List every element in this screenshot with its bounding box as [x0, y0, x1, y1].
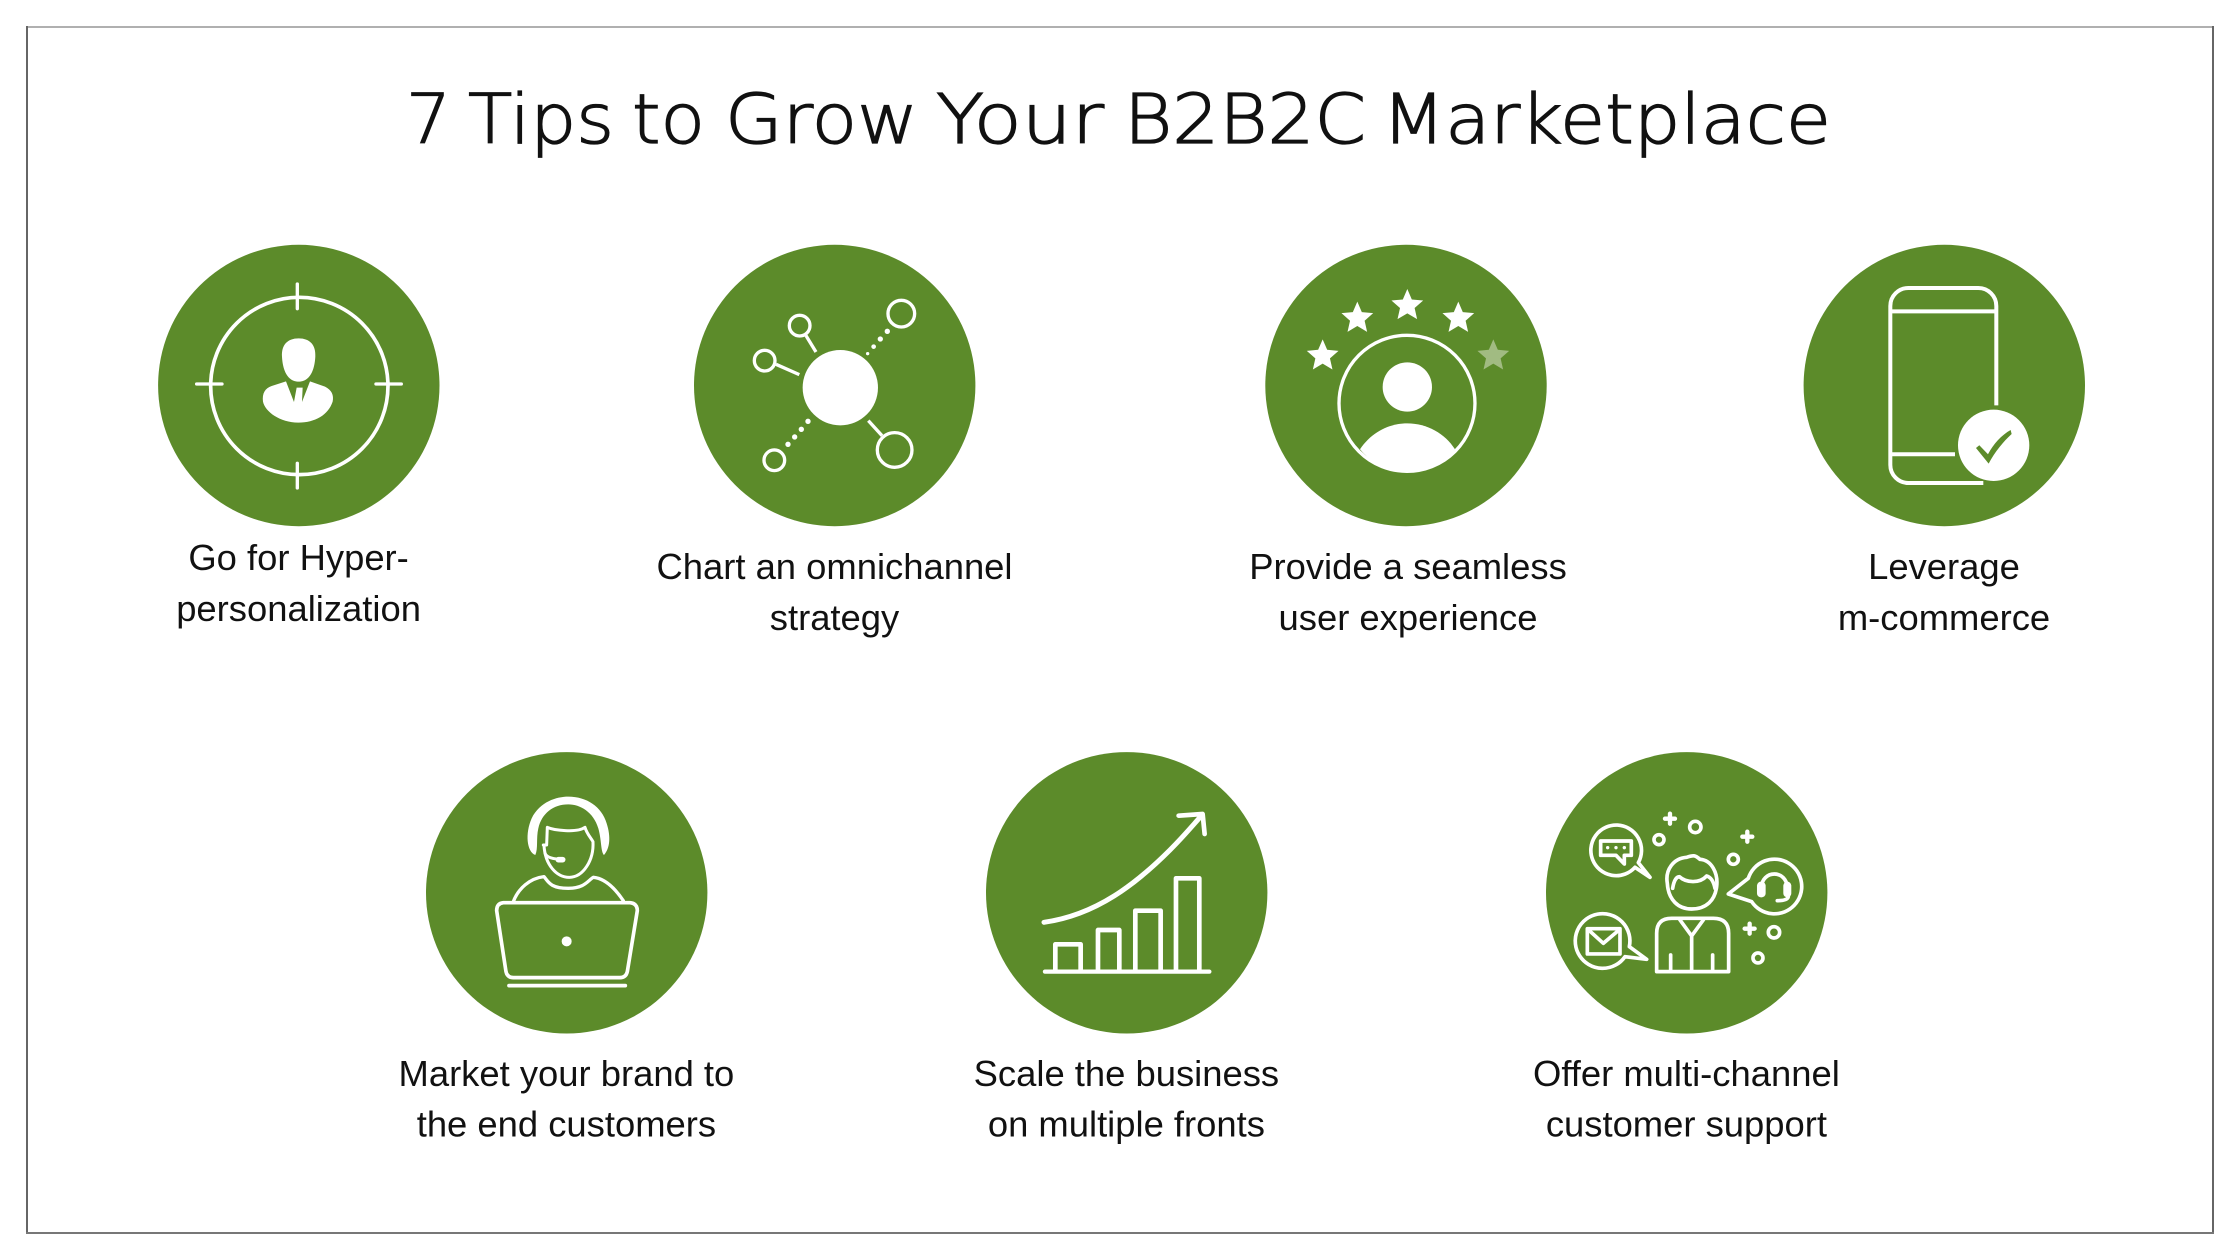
panel: Leverage m-commerce [1804, 245, 2085, 638]
panel: Offer multi-channel customer support [1533, 752, 1840, 1144]
title [406, 80, 1831, 160]
label: Chart an omnichannel [656, 546, 1013, 587]
panel: Provide a seamless user experience [1249, 245, 1567, 638]
label: Leverage [1868, 546, 2020, 587]
icon: target with person [158, 245, 440, 526]
label: strategy [770, 597, 900, 638]
panel: Market your brand to the end customers [399, 752, 734, 1144]
title: B2B2C [1124, 80, 1366, 160]
icon: support agent at laptop [426, 752, 707, 1034]
label: user experience [1279, 597, 1537, 638]
label: on multiple fronts [988, 1104, 1265, 1144]
title: to [632, 80, 705, 160]
label: Go for Hyper- [188, 537, 409, 578]
title: Grow [725, 80, 918, 160]
title: Your [936, 80, 1105, 160]
panel: Go for Hyper-personalization [158, 245, 440, 629]
label: Provide a seamless [1249, 546, 1567, 587]
title: 7 [406, 80, 451, 160]
label: m-commerce [1838, 597, 2050, 638]
label: Scale the business [974, 1053, 1279, 1094]
title: Marketplace [1382, 80, 1831, 160]
label: the end customers [417, 1104, 716, 1144]
label: customer support [1546, 1104, 1827, 1144]
icon: user with star rating [1265, 245, 1547, 526]
title: Tips [468, 80, 614, 160]
icon: agent with channel speech bubbles [1546, 752, 1827, 1034]
label: personalization [176, 588, 421, 629]
label: Market your brand to [399, 1053, 734, 1094]
label: Offer multi-channel [1533, 1053, 1840, 1094]
icon: growth bar chart with arrow [986, 752, 1267, 1034]
icon: hub and spokes [694, 245, 975, 526]
panel: Chart an omnichannel strategy [656, 245, 1013, 638]
icon: smartphone with check badge [1804, 245, 2085, 526]
panel: Scale the business on multiple fronts [974, 752, 1279, 1144]
